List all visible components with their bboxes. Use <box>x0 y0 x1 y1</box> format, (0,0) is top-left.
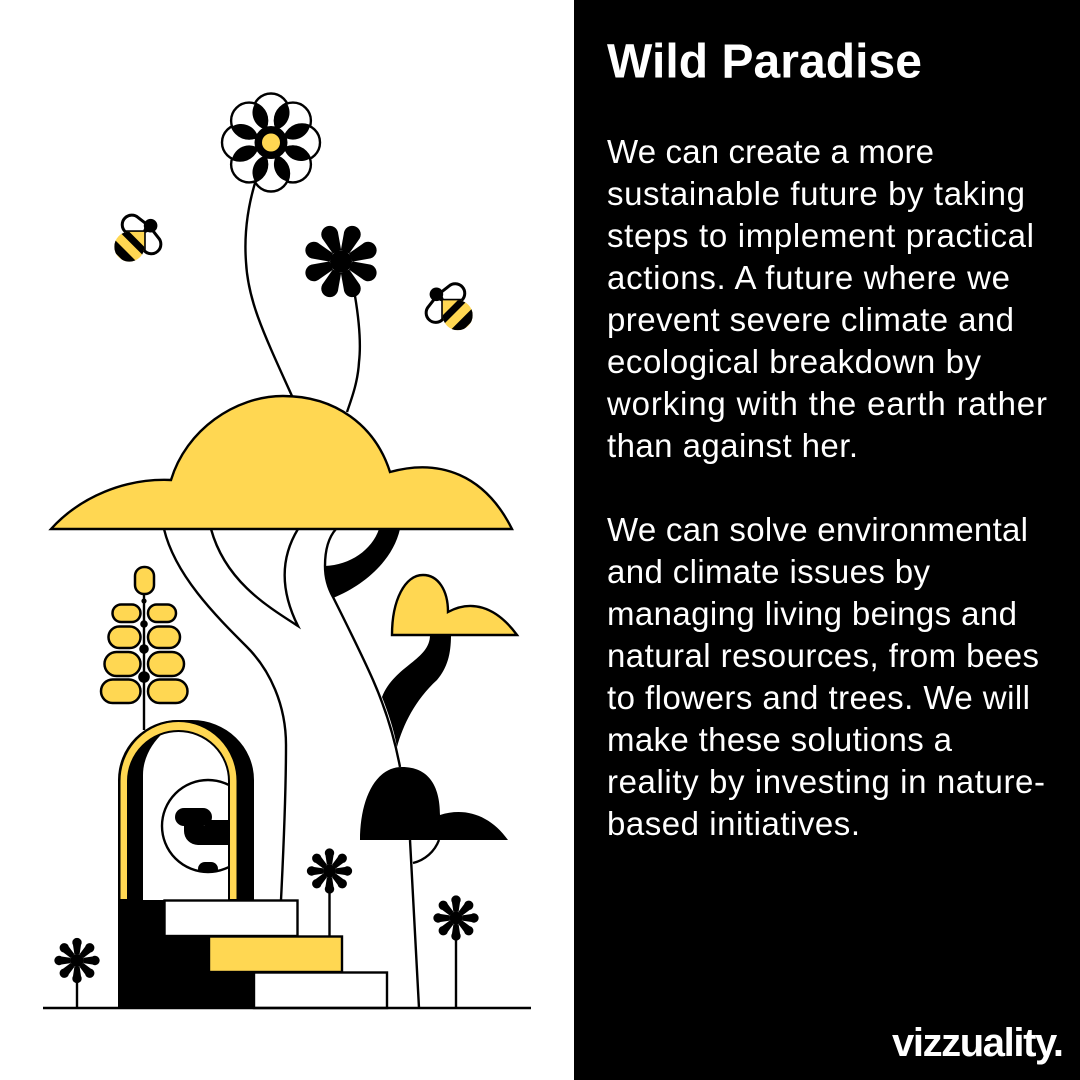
text block: first paragraph <box>606 133 1047 464</box>
stem: black flower <box>347 296 360 412</box>
ground line <box>43 1007 531 1009</box>
plant: lupin <box>101 567 188 730</box>
text block: first paragraph: steps to implement practical <box>607 217 1034 254</box>
text block: first paragraph: working with the earth rather <box>606 385 1047 422</box>
stem: outlined flower <box>245 183 292 396</box>
black branch lower <box>382 635 451 747</box>
text block: second paragraph: to flowers and trees. We will <box>607 679 1030 716</box>
icon: outlined flower <box>222 94 320 192</box>
text block: second paragraph: natural resources, from bees <box>607 637 1039 674</box>
text block: second paragraph <box>607 511 1045 842</box>
black branch upper <box>325 529 400 598</box>
text block: second paragraph: managing living beings and <box>607 595 1017 632</box>
small yellow canopy <box>392 575 517 635</box>
tree trunk left line <box>164 529 286 900</box>
black canopy <box>360 767 508 863</box>
text block: first paragraph: prevent severe climate and <box>607 301 1014 338</box>
text block: second paragraph: make these solutions a <box>607 721 953 758</box>
main yellow canopy <box>51 396 512 529</box>
text block: second paragraph: based initiatives. <box>607 805 860 842</box>
text block: first paragraph: actions. A future where we <box>607 259 1010 296</box>
small flower left <box>54 938 100 1008</box>
tree trunk right line <box>325 529 419 1008</box>
round window with clouds <box>160 778 228 874</box>
text block: first paragraph: sustainable future by taking <box>607 175 1025 212</box>
small flower right <box>433 895 479 1008</box>
panel: text background <box>574 0 1080 1080</box>
text block: first paragraph: We can create a more <box>607 133 934 170</box>
icon: bee right <box>426 284 484 343</box>
small flower middle <box>307 848 352 936</box>
text block: second paragraph: We can solve environmental <box>607 511 1028 548</box>
tree branch <box>211 529 298 626</box>
door arch <box>118 720 254 902</box>
text block: first paragraph: ecological breakdown by <box>607 343 982 380</box>
icon: bee left <box>103 215 161 275</box>
title: Wild Paradise <box>607 36 922 89</box>
stairs <box>118 900 387 1008</box>
icon: black flower <box>303 223 379 300</box>
logo: vizzuality: vizzuality. <box>892 1021 1064 1065</box>
text block: first paragraph: than against her. <box>607 427 858 464</box>
text block: second paragraph: and climate issues by <box>607 553 930 590</box>
text block: second paragraph: reality by investing in nature- <box>607 763 1045 800</box>
